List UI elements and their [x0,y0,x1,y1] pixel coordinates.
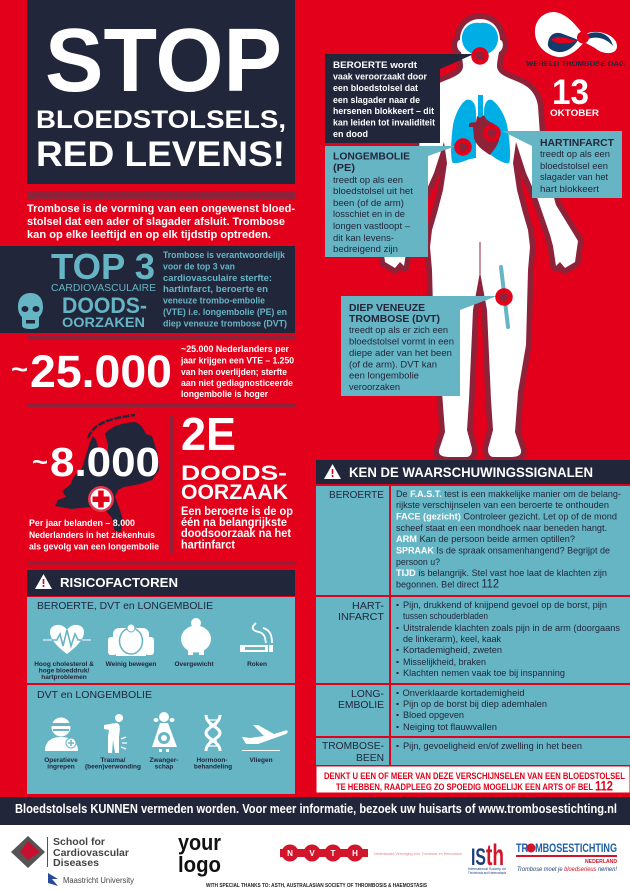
stat description: longembolie is hoger [181,389,268,400]
labels: dvt risk factors: Vliegen [249,757,273,764]
callout: hartinfarct: slagader van het [540,172,608,183]
logo: nvth [280,844,463,862]
row labels: BEROERTE [329,489,384,501]
callout: beroerte: vaak veroorzaakt door [333,72,427,82]
text: trombosebeen signs: Pijn, gevoeligheid en/of zwelling in het been [403,740,582,751]
credits: WITH SPECIAL THANKS TO: ASTH, AUSTRALASIAN SOCIETY OF THROMBOSIS & HAEMOSTASIS [206,883,427,889]
vein in leg [501,267,508,327]
stat: 8.000 [29,439,160,552]
text: hartinfarct signs: Klachten nemen vaak toe bij inspanning [403,667,565,678]
panel: waarschuwingssignalen: KEN DE WAARSCHUWINGSSIGNALEN [349,464,593,480]
row labels: BEEN [356,752,384,764]
text: longembolie signs [396,687,547,732]
labels: general risk factors [34,661,267,681]
row labels [322,489,385,764]
callout: diep veneuze trombose: treedt op als er zich een [349,325,448,336]
callout: diep veneuze trombose: (of de arm). DVT kan [349,360,437,370]
text: longembolie signs: Bloed opgeven [403,709,464,720]
stat: 8.000: ~ [32,449,48,476]
text: hartinfarct signs [396,599,620,678]
row labels: LONG- [351,688,384,700]
stat: 2e doodsoorzaak: OORZAAK [181,481,288,504]
intro text: kan op elke leeftijd en op elk tijdstip optreden. [27,229,271,241]
logo: trombosestichting [516,843,617,873]
callout: beroerte: en dood [333,129,368,140]
callout: beroerte: hersenen blokkeert – dit [333,106,435,117]
icon: airplane [242,725,288,751]
icon: trauma [104,714,127,753]
callout: longembolie: bloedstolsel uit het [333,186,413,197]
logo: wereld trombose dag: WERELD TROMBOSE DAG [526,61,626,68]
logo: school for cardiovascular diseases [11,836,134,886]
callout: hartinfarct: hart blokkeert [540,184,599,195]
row labels: INFARCT [338,611,385,623]
callout: diep veneuze trombose: DIEP VENEUZE [349,302,425,314]
brain [462,23,498,55]
stat: 2e doodsoorzaak: doodsoorzaak na het [181,526,291,540]
labels: general risk factors: hoge bloeddruk/ [39,668,89,674]
callout: longembolie: (PE) [333,162,355,174]
stat description: van hen overlijden; sterfte [181,367,287,378]
labels: dvt risk factors: schap [155,764,173,770]
lungs [451,95,510,163]
icon: pregnant woman [152,712,177,752]
logo placeholder: your logo: your [178,830,221,855]
icon: warning triangle [324,464,341,479]
icon: skull [18,293,43,329]
logo: isth: Thrombosis and Haemostasis [468,871,506,875]
icon: warning triangle [35,574,52,589]
callout: longembolie: LONGEMBOLIE [333,150,410,162]
text: longembolie signs: Neiging tot flauwvallen [403,721,497,732]
panel: risicofactoren [27,570,295,794]
logo: school for cardiovascular diseases: Cardiovascular [53,847,129,859]
intro text [27,203,295,241]
heading: top 3 doodsoorzaken: DOODS- [62,293,147,318]
text: hartinfarct signs: Uitstralende klachten zoals pijn in de arm (doorgaans [403,622,620,633]
stat: 2e doodsoorzaak: Een beroerte is de op [181,504,293,518]
callout: hartinfarct: treedt op als een [540,149,610,160]
callout: longembolie: losschiet en in de [333,209,405,220]
labels: dvt risk factors: ingrepen [47,764,75,770]
top 3 description [163,249,287,328]
callout: hartinfarct: HARTINFARCT [540,137,615,149]
callout: beroerte: kan leiden tot invaliditeit [333,118,436,128]
panel: risicofactoren: DVT en LONGEMBOLIE [37,689,152,701]
text: hartinfarct signs: Kortademigheid, zweten [403,644,502,655]
callout: longembolie: been (of de arm) [333,198,404,209]
stat: 2e doodsoorzaak: één na belangrijkste [181,515,287,529]
title panel: BLOEDSTOLSELS, [36,106,286,134]
heart [469,115,499,155]
callout: hartinfarct: bloedstolsel een [540,161,608,172]
callout: call 112 [316,766,630,794]
labels: general risk factors: Weinig bewegen [106,661,156,668]
text: beroerte signs: ARM Kan de persoon beide armen optillen? [396,533,575,544]
heading: top 3 doodsoorzaken: OORZAKEN [62,314,145,330]
callout: beroerte [325,54,474,143]
icon: dna helix [206,715,220,751]
top 3 description: diep veneuze trombose (DVT) [163,318,287,328]
text: beroerte signs: De F.A.S.T. test is een makkelijke manier om de belang- [396,488,621,499]
stat: 2e doodsoorzaak: hartinfarct [181,538,235,552]
top 3 description: (VTE) i.e. longembolie (PE) en [163,306,287,317]
callout: diep veneuze trombose [341,296,497,396]
heading: top 3 doodsoorzaken: TOP 3 [51,246,155,287]
icon: heart with pulse [43,625,91,654]
text: longembolie signs: Onverklaarde kortademigheid [402,687,524,698]
labels: general risk factors: hartproblemen [41,674,87,681]
logo: isth: IS [471,844,486,871]
row labels: TROMBOSE- [322,740,384,752]
labels: dvt risk factors: Operatieve [44,757,78,764]
stat: 25.000: ~ [11,354,28,384]
text: beroerte signs: persoon u? [396,556,440,567]
callout: longembolie: bedreigend zijn [333,244,398,255]
panel: waarschuwingssignalen [316,460,630,794]
stat description: jaar krijgen een VTE – 1.250 [180,356,294,366]
callout: beroerte: een slagader naar de [333,95,420,106]
text: hartinfarct signs: de linkerarm), keel, kaak [403,633,501,644]
logo: school for cardiovascular diseases: Diseases [53,857,99,869]
stat description: Nederlanders in het ziekenhuis [29,530,155,540]
callout: diep veneuze trombose: TROMBOSE (DVT) [349,313,440,325]
top 3 description: cardiovasculaire sterfte: [163,272,272,283]
stat: 8.000: 8.000 [50,439,160,485]
callout: diep veneuze trombose: bloedstolsel vormt in een [349,336,454,348]
logo placeholder: your logo: logo [178,852,221,877]
text: beroerte signs: TIJD is belangrijk. Stel vast hoe laat de klachten zijn [396,567,607,578]
logo: nvth: H [352,849,358,858]
labels: dvt risk factors: behandeling [194,764,232,770]
row labels: EMBOLIE [338,699,384,711]
labels: dvt risk factors: Zwanger- [150,757,178,764]
stat: 2e doodsoorzaak: 2E [181,408,236,460]
date: 13 oktober: 13 [552,73,589,112]
stat description [180,344,294,400]
logo: nvth: T [331,849,336,858]
text: beroerte signs: FACE (gezicht) Controleer gezicht. Let op of de mond [396,510,617,522]
intro text: Trombose is de vorming van een ongewenst bloed- [27,203,295,215]
illustration: human body [382,19,578,457]
text: beroerte signs: rijkste verschijnselen van een beroerte te onthouden [396,499,609,510]
text: beroerte signs: begonnen. Bel direct 112 [396,578,499,590]
callout: longembolie: treedt op als een [333,175,403,186]
footer banner [0,797,630,825]
stat description: Per jaar belanden – 8.000 [29,518,135,528]
panel: top 3 [0,246,295,333]
callout: diep veneuze trombose: diepe ader van het been [349,348,452,359]
date: 13 oktober: OKTOBER [550,108,599,119]
heading: top 3 doodsoorzaken [51,246,156,330]
map: the Netherlands [55,415,159,532]
icon: person on sofa [108,624,154,656]
icon: overweight person [181,618,211,655]
callout: beroerte: een bloedstolsel dat [333,83,419,94]
callout: longembolie: dit kan levens- [333,233,394,244]
stat description: ~25.000 Nederlanders per [181,344,289,355]
text: hartinfarct signs: Pijn, drukkend of knijpend gevoel op de borst, pijn [403,599,607,610]
title panel: RED LEVENS! [36,135,285,174]
logo: isth [468,839,506,875]
logo: isth: th [486,839,504,872]
logo: isth: International Society on [468,867,506,871]
heading: top 3 doodsoorzaken: CARDIOVASCULAIRE [51,283,156,294]
top 3 description: veneuze trombo-embolie [163,294,265,306]
intro text: stolsel dat een ader of slagader afsluit. Trombose [27,216,285,228]
icon: cigarette [240,623,273,652]
text: beroerte signs: SPRAAK Is de spraak onsamenhangend? Begrijpt de [396,544,610,556]
text: beroerte signs: scheef staat en een mondhoek naar beneden hangt. [396,522,607,533]
callout: call 112: 112 [595,778,613,794]
labels: dvt risk factors: (been)verwonding [85,764,141,770]
callout: beroerte: BEROERTE wordt [333,60,418,71]
date: 13 oktober [550,73,599,119]
text: hartinfarct signs: Misselijkheid, braken [403,656,486,667]
callout: hartinfarct [502,131,622,198]
stat description: aan niet gediagnosticeerde [181,378,293,389]
callout: longembolie: longen vastloopt – [333,221,411,232]
stat: 2e doodsoorzaak [181,408,293,552]
callout: diep veneuze trombose: een longembolie [349,370,419,382]
callout: longembolie [325,146,456,257]
labels: general risk factors: Hoog cholesterol & [34,661,94,668]
logo: trombosestichting: Trombose moet je bloedserieus nemen! [517,866,617,873]
stat: 25.000: 25.000 [30,346,172,397]
markers: clot locations [456,50,510,304]
logo: trombosestichting: NEDERLAND [585,859,617,865]
stat description [29,518,159,552]
logo: school for cardiovascular diseases: Maastricht University [63,876,134,885]
text: beroerte signs [396,488,621,590]
callout: diep veneuze trombose: veroorzaken [349,382,400,393]
logo: nvth: N [287,849,293,858]
logo: nvth: Nederlandse Vereniging voor Trombose en Hemostase [374,851,463,856]
icon: surgeon [45,718,78,751]
panel: risicofactoren: BEROERTE, DVT en LONGEMBOLIE [37,600,213,612]
stat: 2e doodsoorzaak: DOODS- [181,462,287,485]
row labels: HART- [352,600,385,612]
labels: general risk factors: Overgewicht [174,661,214,668]
logo: school for cardiovascular diseases: School for [53,836,105,848]
text: hartinfarct signs: tussen schouderbladen [403,610,488,621]
labels: dvt risk factors [44,757,273,770]
icon: plus in circle [88,486,114,512]
labels: dvt risk factors: Hormoon- [196,757,228,764]
top 3 description: hartinfarct, beroerte en [163,283,268,294]
labels: general risk factors: Roken [247,661,267,668]
panel: risicofactoren: RISICOFACTOREN [60,575,178,590]
text: longembolie signs: Pijn op de borst bij diep ademhalen [403,698,547,709]
labels: dvt risk factors: Trauma/ [101,757,126,764]
logo: nvth: V [309,849,315,858]
stat: 25.000 [11,344,294,400]
top 3 description: voor de top 3 van [163,260,235,272]
stat description: als gevolg van een longembolie [29,542,159,552]
logo: wereld trombose dag [526,12,626,68]
top 3 description: Trombose is verantwoordelijk [163,249,286,260]
title panel: STOP [45,11,282,111]
logo placeholder: your logo [178,830,221,877]
title panel [27,0,295,184]
